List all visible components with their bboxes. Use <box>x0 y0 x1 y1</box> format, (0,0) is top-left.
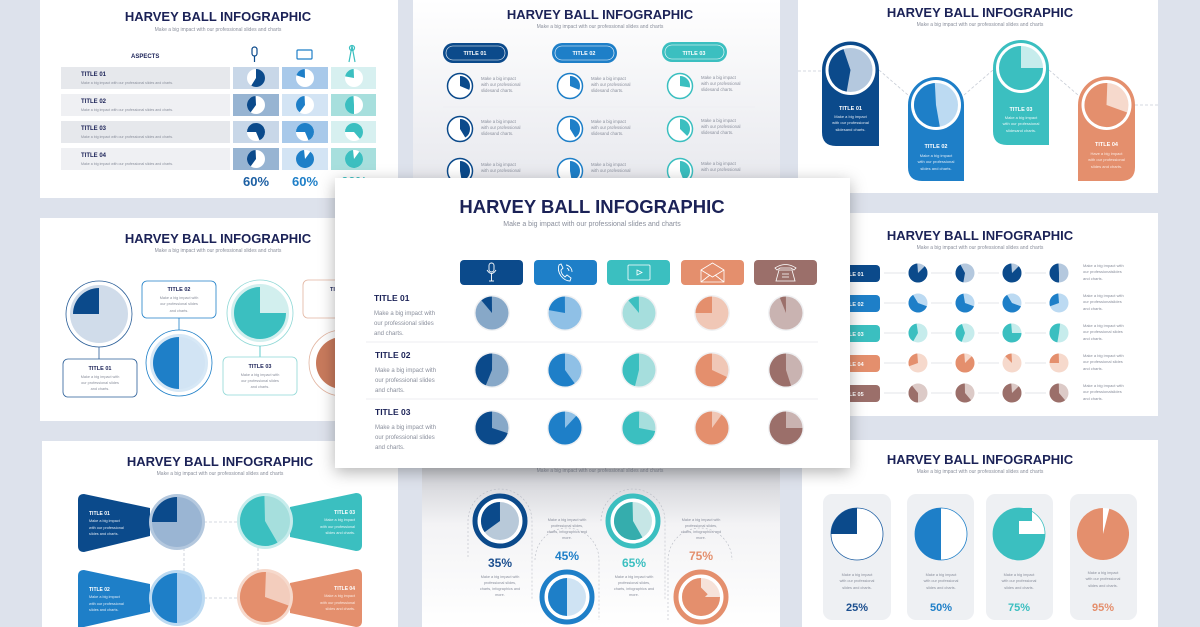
ring 45%: Make a big impact with <box>548 518 586 522</box>
slide: top-middle title pills: Make a big impact with our professional slides and charts <box>537 24 664 30</box>
card 03 TR: with our professional <box>1003 121 1039 126</box>
slide: middle-right harvey ball progression: Make a big impact with <box>1083 293 1124 298</box>
card 03 TR: TITLE 03 <box>1010 107 1032 113</box>
slide: top-left table <box>40 0 398 198</box>
pills TM: TITLE 01 <box>464 51 486 57</box>
table rows TL: Make a big impact with our professional slides and charts. <box>81 81 173 85</box>
card 01 TR: TITLE 01 <box>839 106 862 112</box>
card 50%: Make a big impact <box>926 573 957 577</box>
icon: video <box>607 260 670 285</box>
card 03 TR: slidesand charts. <box>1006 128 1036 133</box>
card 25%: with our professional <box>840 579 875 583</box>
ball 03 ML: TITLE 03 <box>249 364 271 370</box>
ring 65%: professional slides, <box>618 581 650 585</box>
item 04 BL: slides and charts. <box>325 607 355 611</box>
card 75%: slides and charts. <box>1004 586 1034 590</box>
table rows TL: Make a big impact with our professional slides and charts. <box>81 162 173 166</box>
ring 45%: charts, infographics and <box>547 530 587 534</box>
ball 02 ML <box>142 281 216 396</box>
icon: microphone <box>460 260 523 285</box>
text TM: slidesand charts. <box>591 131 623 136</box>
text TM: Make a big impact <box>701 75 737 80</box>
text TM: Make a big impact <box>481 162 517 167</box>
row labels center: TITLE 01 <box>374 293 410 303</box>
text TM: with our professional <box>701 124 740 129</box>
item 04 BL: with our professional <box>320 601 355 605</box>
slide: middle-right harvey ball progression: our professionalslides <box>1083 299 1122 304</box>
row labels center: and charts. <box>374 331 404 337</box>
row labels center: Make a big impact with <box>375 425 436 431</box>
card 50%: with our professional <box>924 579 959 583</box>
card 95%: slides and charts. <box>1088 584 1118 588</box>
row labels center: our professional slides <box>375 378 435 384</box>
text TM: Make a big impact <box>481 76 517 81</box>
item 01 BL: Make a big impact <box>89 519 121 523</box>
ball 01 ML: our professional slides <box>81 381 119 385</box>
ring 35%: more. <box>495 593 505 597</box>
ball 01 ML <box>63 281 137 397</box>
slide: middle-right harvey ball progression: LE 05 <box>849 392 864 398</box>
table rows TL <box>61 67 376 170</box>
ring 65%: 65% <box>622 556 646 570</box>
text TM: with our professional <box>591 168 630 173</box>
ball 03 ML <box>223 280 297 395</box>
heading TL: HARVEY BALL INFOGRAPHIC <box>125 9 312 24</box>
slide: middle-right harvey ball progression: Make a big impact with <box>1083 323 1124 328</box>
slide: middle-right harvey ball progression: and charts. <box>1083 396 1103 401</box>
card 75%: Make a big impact <box>1004 573 1035 577</box>
ring 65% <box>608 496 658 597</box>
ring 35%: 35% <box>488 556 512 570</box>
slide: bottom-left bowtie: Make a big impact with our professional slides and charts <box>157 471 284 477</box>
ring 45% <box>542 518 592 622</box>
slide: top-right staggered cards <box>798 0 1158 193</box>
ring 75% <box>676 518 726 622</box>
table rows TL: Make a big impact with our professional slides and charts. <box>81 108 173 112</box>
table rows TL: TITLE 04 <box>81 153 107 159</box>
ball 02 ML: our professional slides <box>160 302 198 306</box>
subheading center: Make a big impact with our professional slides and charts <box>503 221 681 228</box>
card 95%: with our professional <box>1086 577 1121 581</box>
card 50% <box>907 494 974 620</box>
text TM: with our professional <box>481 82 520 87</box>
ring 75%: more. <box>696 536 706 540</box>
slide: middle-right harvey ball progression: LE 02 <box>849 302 864 308</box>
item 03 BL: Make a big impact <box>324 518 356 522</box>
heading TM: HARVEY BALL INFOGRAPHIC <box>507 7 694 22</box>
row labels center: Make a big impact with <box>374 311 435 317</box>
ring 35% <box>475 496 525 597</box>
slide: middle-right harvey ball progression: our professional slides <box>1083 329 1123 334</box>
pills TM: TITLE 02 <box>573 51 595 57</box>
pills TM: TITLE 03 <box>683 51 705 57</box>
row labels center: Make a big impact with <box>375 368 436 374</box>
card 75%: 75% <box>1008 602 1030 614</box>
item 03 BL: with our professional <box>320 525 355 529</box>
card 75%: with our professional <box>1002 579 1037 583</box>
card 25%: 25% <box>846 602 868 614</box>
slide: middle-right harvey ball progression: Make a big impact with <box>1083 383 1124 388</box>
row labels center: our professional slides <box>375 435 435 441</box>
table rows TL: TITLE 01 <box>81 72 107 78</box>
ball 02 ML: and charts. <box>170 309 188 313</box>
table rows TL: TITLE 03 <box>81 126 107 132</box>
card 25% <box>823 494 891 620</box>
card 02 TR: with our professional <box>918 159 954 164</box>
item 02 BL: Make a big impact <box>89 595 121 599</box>
slide: middle-right harvey ball progression: Make a big impact with <box>1083 353 1124 358</box>
heading ML: HARVEY BALL INFOGRAPHIC <box>125 231 312 246</box>
text TM: Make a big impact <box>591 162 627 167</box>
text TM: with our professional <box>701 167 740 172</box>
ring 65%: more. <box>629 593 639 597</box>
slide: center featured harvey ball table <box>335 178 850 468</box>
card 25%: Make a big impact <box>842 573 873 577</box>
item 02 BL: slides and charts. <box>89 608 119 612</box>
text TM: slidesand charts. <box>701 87 733 92</box>
slide: middle-right harvey ball progression: and charts. <box>1083 306 1103 311</box>
card 50%: 50% <box>930 602 952 614</box>
ball 03 ML: and charts. <box>251 385 269 389</box>
card 01 TR <box>822 41 879 146</box>
ring 45%: 45% <box>555 549 579 563</box>
ring 65%: charts, infographics and <box>614 587 654 591</box>
heading BR: HARVEY BALL INFOGRAPHIC <box>887 452 1074 467</box>
icons TL <box>252 46 355 62</box>
icon header boxes <box>460 260 817 285</box>
row labels center: and charts. <box>375 388 405 394</box>
row labels center: TITLE 02 <box>375 350 411 360</box>
card 04 TR: with our professional <box>1088 157 1125 162</box>
slide: middle-right harvey ball progression: our professionalslides <box>1083 389 1122 394</box>
card 50%: slides and charts. <box>926 586 956 590</box>
item 03 BL <box>237 493 362 551</box>
text TM: slidesand charts. <box>481 88 513 93</box>
card 04 TR: Have a big impact <box>1090 151 1123 156</box>
slide: middle-right harvey ball progression: and charts. <box>1083 276 1103 281</box>
slide: middle-right harvey ball progression: LE 03 <box>849 332 864 338</box>
item 01 BL: with our professional <box>89 526 124 530</box>
row labels center: TITLE 03 <box>375 407 411 417</box>
card 02 TR: slides and charts. <box>920 166 952 171</box>
slide: middle-right harvey ball progression <box>820 213 1158 416</box>
ring 45%: more. <box>562 536 572 540</box>
slide: middle-right harvey ball progression: Make a big impact with our professional slides and charts <box>917 245 1044 251</box>
icon: telephone <box>754 260 817 285</box>
card 25%: slides and charts. <box>842 586 872 590</box>
heading MR: HARVEY BALL INFOGRAPHIC <box>887 228 1074 243</box>
item 02 BL: TITLE 02 <box>89 587 110 593</box>
slide: bottom-left bowtie <box>42 441 398 627</box>
outline harvey balls TM <box>443 74 755 184</box>
row labels center: and charts. <box>375 445 405 451</box>
item 02 BL <box>78 570 205 627</box>
ring 75%: 75% <box>689 549 713 563</box>
rows MR <box>884 273 1046 393</box>
ball 04 ML partial: TITLE 04 <box>330 287 354 293</box>
percentages TL: 60% <box>341 174 367 189</box>
card 01 TR: Make a big impact <box>834 114 868 119</box>
card 04 TR: TITLE 04 <box>1095 142 1119 148</box>
ball 02 ML: Make a big impact with <box>160 296 198 300</box>
text TM: Make a big impact <box>701 118 737 123</box>
item 04 BL <box>237 569 362 627</box>
slide: middle-right harvey ball progression: and charts. <box>1083 366 1103 371</box>
slide: middle-right harvey ball progression: LE 04 <box>849 362 865 368</box>
text TM: Make a big impact <box>701 161 737 166</box>
ring 75%: charts, infographics and <box>681 530 721 534</box>
card 95%: Make a big impact <box>1088 571 1119 575</box>
card 95%: 95% <box>1092 602 1114 614</box>
card 02 TR: TITLE 02 <box>925 144 947 150</box>
item 01 BL <box>78 494 205 552</box>
slide: middle-right harvey ball progression: our professionalslides <box>1083 269 1122 274</box>
text TM: with our professional <box>591 82 630 87</box>
percentages TL: 60% <box>243 174 269 189</box>
ball 04 ML partial <box>303 280 375 396</box>
ball 03 ML: Make a big impact with <box>241 373 279 377</box>
card 04 TR: slides and charts. <box>1091 164 1122 169</box>
text TM: Make a big impact <box>591 119 627 124</box>
text TM: with our professional <box>701 81 740 86</box>
ring 75%: professional slides, <box>685 524 717 528</box>
item 03 BL: slides and charts. <box>325 531 355 535</box>
slide: bottom-middle ring percentages: Make a big impact with our professional slides and charts <box>537 468 664 474</box>
slide: bottom-middle ring percentages <box>422 440 780 627</box>
item 01 BL: TITLE 01 <box>89 511 110 517</box>
text TM: slidesand charts. <box>701 130 733 135</box>
row labels center <box>374 293 436 451</box>
text TM <box>481 75 740 173</box>
text TM: with our professional <box>481 125 520 130</box>
text TM: Make a big impact <box>591 76 627 81</box>
ball 03 ML: our professional slides <box>241 379 279 383</box>
slide: top-left table: Make a big impact with our professional slides and charts <box>155 27 282 33</box>
slide: top-left table: ASPECTS <box>131 54 159 60</box>
slide: middle-right harvey ball progression: Make a big impact with <box>1083 263 1124 268</box>
item 02 BL: with our professional <box>89 602 124 606</box>
ball 01 ML: Make a big impact with <box>81 375 119 379</box>
item 04 BL: TITLE 04 <box>334 586 355 592</box>
ring 45%: professional slides, <box>551 524 583 528</box>
item 04 BL: Make a big impact <box>324 594 356 598</box>
card 03 TR <box>993 40 1049 145</box>
table rows TL: TITLE 02 <box>81 99 107 105</box>
percentages TL <box>243 174 367 189</box>
card 02 TR <box>908 77 964 181</box>
ring 65%: Make a big impact with <box>615 575 653 579</box>
icon: phone <box>534 260 597 285</box>
icon: envelope <box>681 260 744 285</box>
pills TM <box>443 42 727 63</box>
ring 35%: professional slides, <box>484 581 516 585</box>
slide: top-middle title pills <box>413 0 780 184</box>
ring 35%: charts, infographics and <box>480 587 520 591</box>
ball 02 ML: TITLE 02 <box>168 287 190 293</box>
heading TR: HARVEY BALL INFOGRAPHIC <box>887 5 1074 20</box>
text TM: with our professional <box>591 125 630 130</box>
card 02 TR: Make a big impact <box>920 153 953 158</box>
card 01 TR: slidesand charts. <box>835 127 866 132</box>
item 01 BL: slides and charts. <box>89 532 119 536</box>
text TM: Make a big impact <box>481 119 517 124</box>
item 03 BL: TITLE 03 <box>334 510 355 516</box>
slide: bottom-right percentage cards: Make a big impact with our professional slides and charts <box>917 469 1044 475</box>
slide: middle-left balls with boxes: Make a big impact with our professional slides and charts <box>155 248 282 254</box>
slide: middle-right harvey ball progression: our professional slides <box>1083 359 1123 364</box>
slide: middle-left balls with boxes <box>40 218 375 421</box>
slide: bottom-right percentage cards <box>802 440 1158 627</box>
slide: middle-right harvey ball progression: and charts. <box>1083 336 1103 341</box>
percentages TL: 60% <box>292 174 318 189</box>
ball 01 ML: and charts. <box>91 387 109 391</box>
harvey ball grid center <box>474 295 804 446</box>
row labels center: our professional slides <box>374 321 434 327</box>
card 75% <box>986 494 1053 620</box>
card 03 TR: Make a big impact <box>1005 115 1038 120</box>
table rows TL: Make a big impact with our professional slides and charts. <box>81 135 173 139</box>
text TM: slidesand charts. <box>481 131 513 136</box>
heading center: HARVEY BALL INFOGRAPHIC <box>459 196 725 217</box>
ring 35%: Make a big impact with <box>481 575 519 579</box>
slide: middle-right harvey ball progression: LE 01 <box>849 272 864 278</box>
text TM: with our professional <box>481 168 520 173</box>
ring 75%: Make a big impact with <box>682 518 720 522</box>
heading BL: HARVEY BALL INFOGRAPHIC <box>127 454 314 469</box>
harvey balls TL <box>247 69 363 168</box>
text TM: slidesand charts. <box>591 88 623 93</box>
ball 01 ML: TITLE 01 <box>89 366 111 372</box>
card 04 TR <box>1078 76 1135 181</box>
card 01 TR: with our professional <box>832 120 869 125</box>
slide: top-right staggered cards: Make a big impact with our professional slides and charts <box>917 22 1044 28</box>
card 95% <box>1070 494 1137 620</box>
